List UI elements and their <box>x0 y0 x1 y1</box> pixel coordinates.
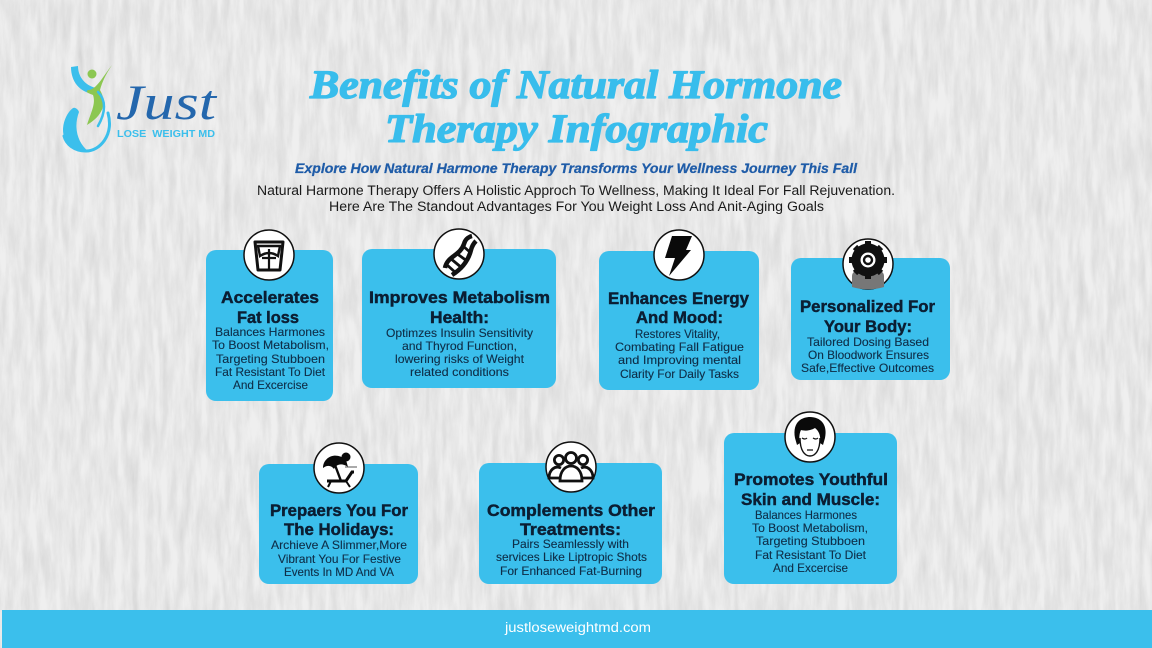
panel: improves metabolism health: Health: <box>430 309 489 327</box>
description: related conditions <box>410 365 509 379</box>
description: and Thyrod Function, <box>402 339 517 353</box>
description: For Enhanced Fat-Burning <box>500 564 642 578</box>
description <box>271 538 407 579</box>
panel: accelerates fat loss <box>206 230 333 401</box>
description: Vibrant You For Festive <box>278 552 401 566</box>
panel: prepares you for the holidays: The Holidays: <box>284 521 394 539</box>
icon: beach lounger and umbrella <box>314 443 364 493</box>
description: Safe,Effective Outcomes <box>801 361 934 375</box>
description <box>615 327 744 381</box>
description: Combating Fall Fatigue <box>615 340 744 354</box>
panel: accelerates fat loss: Fat loss <box>237 309 299 327</box>
subtitle: Explore How Natural Harmone Therapy Transforms Your Wellness Journey This Fall <box>295 161 857 176</box>
panel: personalized for your body <box>791 239 950 380</box>
description: Tailored Dosing Based <box>807 335 929 349</box>
heading: Prepaers You For <box>270 502 409 520</box>
panel: complements other treatments: Treatments: <box>520 521 621 539</box>
intro text: Natural Harmone Therapy Offers A Holistic Approch To Wellness, Making It Ideal For Fall Rejuvenation. <box>257 183 895 198</box>
heading: Accelerates <box>221 289 319 307</box>
description: And Excercise <box>233 378 308 392</box>
logo wordmark: Just <box>116 74 217 130</box>
title <box>309 62 842 151</box>
panel: enhances energy and mood <box>599 230 759 390</box>
description: Archieve A Slimmer,More <box>271 538 407 552</box>
heading: Improves Metabolism <box>369 289 550 307</box>
description: And Excercise <box>773 561 848 575</box>
description <box>496 537 647 578</box>
description: Clarity For Daily Tasks <box>620 367 739 381</box>
description: Pairs Seamlessly with <box>512 537 629 551</box>
logo <box>63 65 217 151</box>
description: Balances Harmones <box>215 325 325 339</box>
panel: improves metabolism health <box>362 229 556 388</box>
intro text <box>257 183 895 214</box>
panel: promotes youthful skin and muscle <box>724 412 897 584</box>
title: Therapy Infographic <box>385 106 768 151</box>
icon: lightning bolt <box>654 230 704 280</box>
description: Balances Harmones <box>755 508 857 522</box>
description: and Improving mental <box>618 353 741 367</box>
description <box>752 508 868 575</box>
description <box>212 325 329 392</box>
description: Targeting Stubboen <box>216 352 325 366</box>
icon: woman's face <box>785 412 835 462</box>
panel: complements other treatments <box>479 442 662 584</box>
heading: Promotes Youthful <box>734 471 888 489</box>
icon: gear and body <box>843 239 893 289</box>
description: Restores Vitality, <box>635 327 720 341</box>
logo tagline: LOSE WEIGHT MD <box>117 128 215 140</box>
description: Targeting Stubboen <box>756 534 865 548</box>
icon: weighing scale <box>244 230 294 280</box>
footer url: justloseweightmd.com <box>504 620 651 635</box>
icon: DNA helix <box>434 229 484 279</box>
description: Fat Resistant To Diet <box>215 365 326 379</box>
icon: figure and swoosh <box>63 65 112 151</box>
intro text: Here Are The Standout Advantages For You Weight Loss And Anit-Aging Goals <box>329 199 824 214</box>
title: Benefits of Natural Hormone <box>309 62 842 107</box>
heading: Personalized For <box>800 298 936 316</box>
panel: prepares you for the holidays <box>259 443 418 584</box>
panel: personalized for your body: Your Body: <box>824 318 912 336</box>
panel: promotes youthful skin and muscle: Skin and Muscle: <box>741 491 880 509</box>
description: On Bloodwork Ensures <box>808 348 929 362</box>
panel: enhances energy and mood: And Mood: <box>636 309 723 327</box>
description <box>386 326 533 379</box>
description: To Boost Metabolism, <box>752 521 868 535</box>
description: Optimzes Insulin Sensitivity <box>386 326 533 340</box>
description: Events In MD And VA <box>284 565 394 579</box>
description: lowering risks of Weight <box>395 352 525 366</box>
footer bar <box>2 610 1152 648</box>
icon: group of people <box>546 442 596 492</box>
heading: Enhances Energy <box>608 290 750 308</box>
description: services Like Liptropic Shots <box>496 550 647 564</box>
description <box>801 335 934 375</box>
description: Fat Resistant To Diet <box>755 548 867 562</box>
heading: Complements Other <box>487 502 656 520</box>
description: To Boost Metabolism, <box>212 338 329 352</box>
